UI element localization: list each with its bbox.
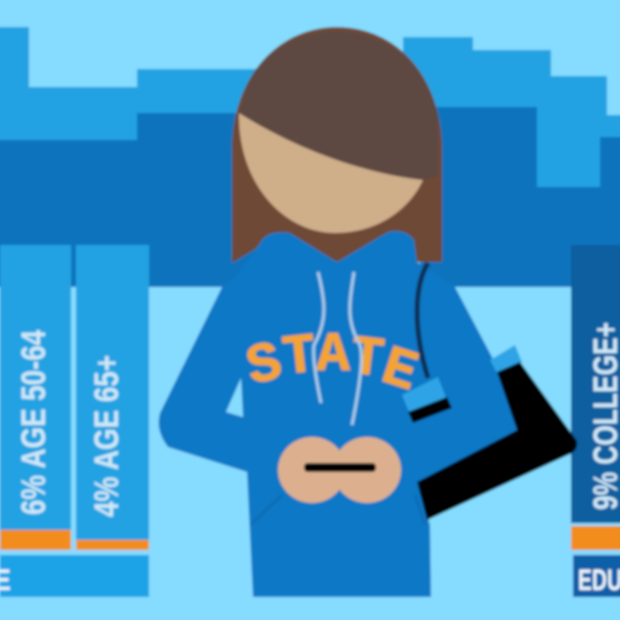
chest text: STATE: T (346, 325, 387, 393)
bag strap (417, 263, 428, 378)
strap tag (402, 377, 446, 414)
background: skyline dark layer (0, 107, 620, 287)
face (239, 113, 423, 233)
bag (417, 362, 577, 520)
column: age 65+ (76, 245, 149, 550)
chest text: STATE: E (374, 335, 426, 406)
hands (278, 437, 401, 503)
figure: student (159, 27, 577, 597)
age category bar (0, 555, 149, 597)
hoodie (159, 231, 517, 597)
hair fringe (239, 31, 438, 180)
arm gap (226, 378, 243, 417)
drawstrings (314, 272, 361, 425)
chest text: STATE: S (240, 330, 288, 401)
pocket line (250, 495, 425, 525)
label: 4% age 65+: 4% AGE 65+ (88, 355, 126, 517)
column: age 50-64 (0, 245, 71, 550)
panel: age columns (0, 245, 149, 597)
chest text: STATE: T (279, 324, 319, 391)
panel: education column (571, 245, 620, 597)
phone (304, 463, 376, 472)
chest text: STATE (240, 323, 426, 406)
background: skyline light layer (0, 27, 620, 190)
label: 6% age 50-64: 6% AGE 50-64 (15, 330, 53, 515)
chest text: STATE: A (316, 323, 350, 387)
bag trim (490, 345, 522, 373)
hair (232, 27, 442, 263)
